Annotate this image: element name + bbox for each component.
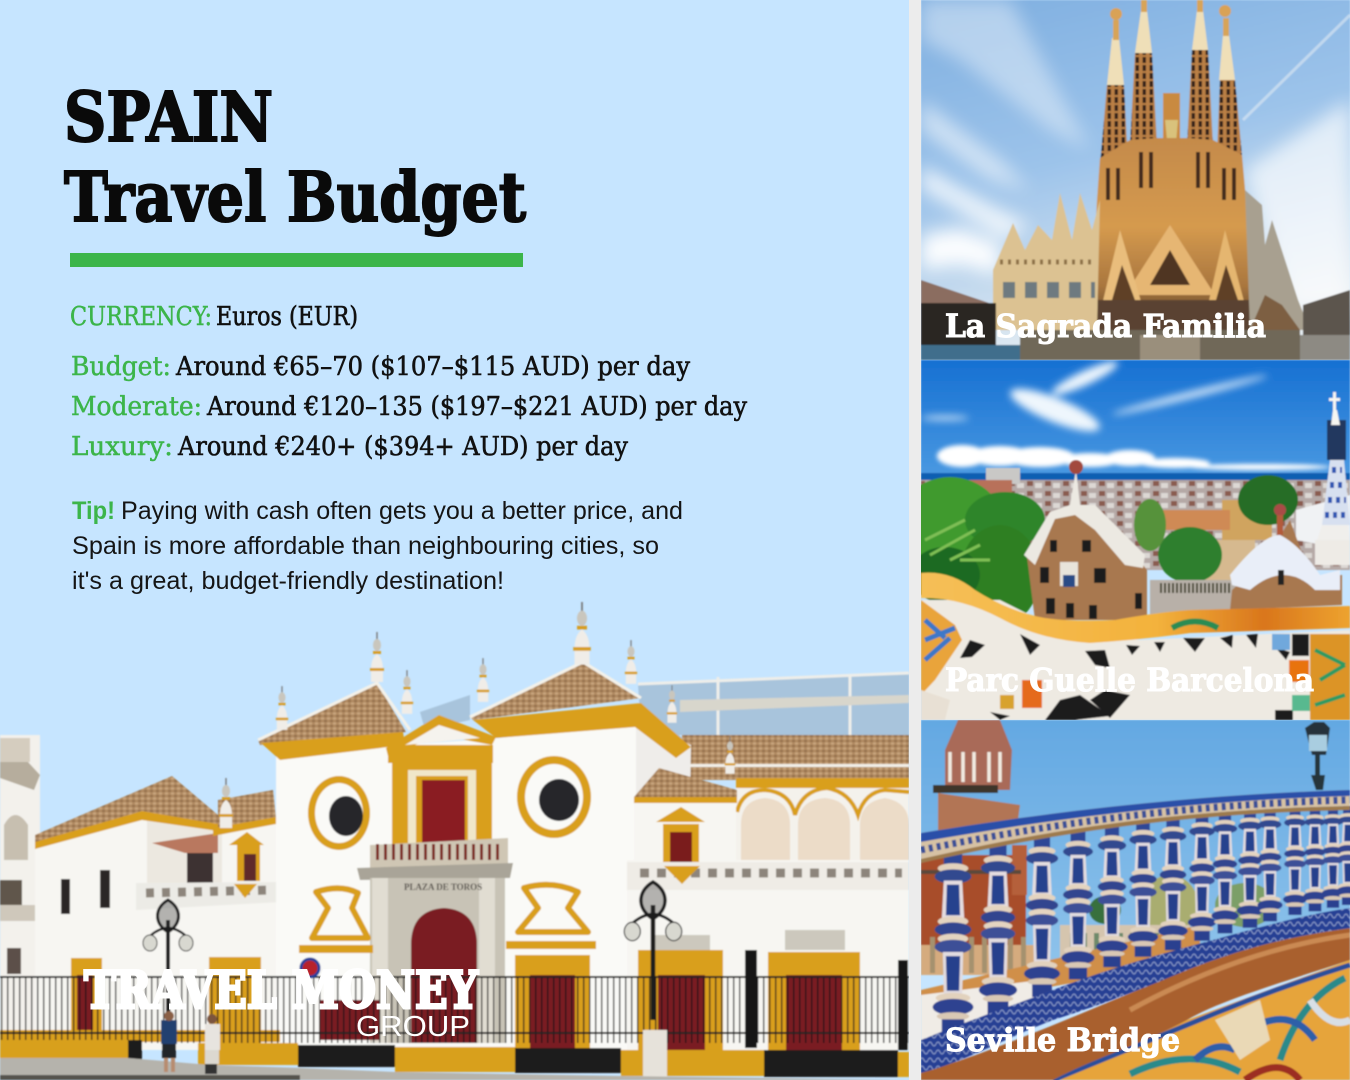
lamp pedestal [643,1030,667,1080]
wispy clouds [921,356,1268,439]
text block: currency and daily budgets [70,302,748,462]
budget line: Budget: [71,352,171,382]
lantern [1305,722,1330,790]
photo panel: Seville Bridge [921,720,1350,1080]
left buildings [921,280,995,360]
brick tower [921,720,1027,945]
wooden coping [921,928,1350,1080]
sky [921,0,1350,360]
left pavilion roof [258,683,406,745]
luxury line: Luxury: [71,432,173,462]
left small gold window [229,832,264,845]
main facade [1096,137,1250,302]
photo panel: Parc Guell [892,356,1350,720]
logo: Travel Money Group [84,961,478,1043]
divider strip [909,0,921,1080]
right small gold window [656,807,705,822]
right pavilion roof [470,662,641,720]
stone portal [370,878,505,1043]
gold scrollwork [299,885,596,949]
caption: La Sagrada Familia [945,307,1266,345]
handrail [921,790,1350,863]
left wing wall [35,815,280,1050]
distant balustrade and trees [921,875,1275,1040]
pediment [386,715,496,756]
ground wall [1020,330,1300,360]
currency line: CURRENCY: [70,302,212,332]
canopy behind [638,673,909,745]
balcony [357,838,513,880]
stone portal: PLAZA DE TOROS [404,882,482,892]
text block: tip: Spain is more affordable than neighbouring cities, so [72,532,659,560]
blue tiled band [921,908,1350,1073]
left balustrade [136,882,281,910]
crowd plaza [1150,580,1245,620]
clouds [921,0,1350,310]
gold plinths [0,1040,909,1077]
central red door and gold surround [392,763,492,845]
towers [1100,0,1243,158]
tile panel below bridge [1040,960,1350,1080]
title: Travel Budget [64,158,526,238]
moderate line: Around €120–135 ($197–$221 AUD) per day [206,392,748,422]
tourists [161,1011,220,1074]
colourful tiles [921,600,962,695]
city [921,480,1350,570]
pavement [0,1058,909,1080]
mosaic shards [960,634,1309,720]
round window right [517,756,591,838]
caption: Parc Guelle Barcelona [945,661,1314,699]
trees [892,475,1298,625]
right balustrade [627,862,909,890]
iron fence [0,978,909,1043]
left far tower [0,735,40,1075]
moderate line: Moderate: [71,392,202,422]
text block: tip: it's a great, budget-friendly destination! [72,567,504,595]
currency line: Euros (EUR) [216,302,358,332]
black lower fence [128,1040,898,1077]
text block: tip: Tip! [72,497,115,525]
mosaic tower [1315,392,1350,565]
panel: sky background [0,0,909,1080]
main right wing wall [690,860,909,1052]
arcade [736,788,909,863]
caption: Seville Bridge [945,1021,1180,1059]
left facade [993,193,1100,330]
balusters [933,806,1350,1034]
title underline [70,253,523,267]
wavy bench top [921,573,1350,643]
text block: tip [72,497,683,595]
gingerbread house right [1230,504,1342,610]
left wing roof [35,776,218,843]
central block wall [274,726,637,1052]
no parking sign [301,959,319,977]
sky [921,720,1350,960]
luxury line: Around €240+ ($394+ AUD) per day [177,432,629,462]
upper rear roof strips [682,735,909,764]
gold doors [0,950,860,1050]
gingerbread house left [1024,460,1147,620]
right small tower [689,802,738,860]
signs [655,935,710,951]
title [64,78,526,238]
sky [921,360,1350,480]
spires [276,602,735,774]
logo: Travel Money Group: GROUP [356,1011,470,1043]
mosaic wall [921,600,1350,720]
photo: Plaza de Toros building, Seville [0,602,909,1080]
sea [921,473,1350,481]
title: SPAIN [64,78,273,158]
cloud bank [937,445,1330,470]
currency line [70,302,358,332]
street lamps [143,900,193,1020]
budget line: Around €65–70 ($107–$115 AUD) per day [175,352,691,382]
text block: tip: Paying with cash often gets you a better price, and [121,497,683,525]
right side tower [1245,190,1310,330]
right buildings [1303,290,1350,335]
photo panel: La Sagrada Familia [921,0,1350,360]
round window left [308,776,370,850]
logo: Travel Money Group: TRAVEL MONEY [84,961,478,1021]
